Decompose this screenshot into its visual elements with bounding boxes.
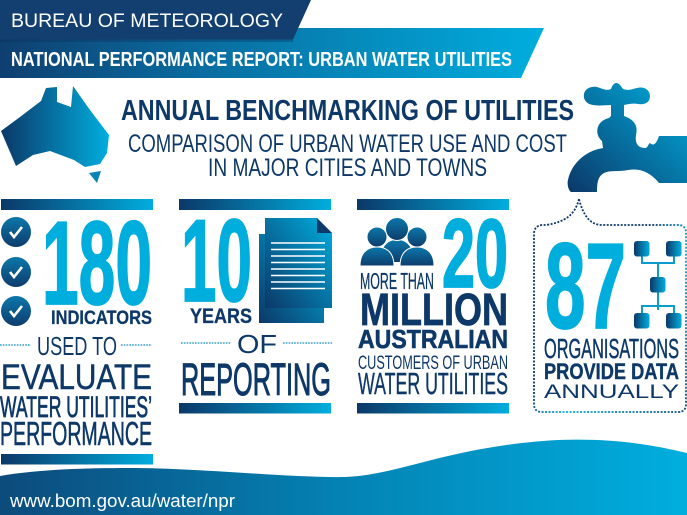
title: ANNUAL BENCHMARKING OF UTILITIES	[121, 95, 574, 127]
label: customers of urban: CUSTOMERS OF URBAN	[358, 353, 508, 374]
icon: check marks	[1, 217, 31, 326]
panel: more than 20 million customers	[357, 199, 509, 414]
icon: map of Australia	[1, 86, 109, 183]
label: australian: AUSTRALIAN	[358, 324, 508, 354]
icon: network diagram	[634, 241, 682, 328]
number 10: 10	[181, 195, 252, 326]
footer url: www.bom.gov.au/water/npr	[9, 490, 235, 511]
label: indicators: INDICATORS	[51, 307, 152, 329]
label: reporting: REPORTING	[181, 354, 331, 405]
label: million: MILLION	[360, 284, 508, 335]
panel: 10 years of reporting	[179, 195, 332, 414]
label: years: YEARS	[190, 304, 252, 328]
panel: 180 indicators	[0, 197, 153, 464]
icon: water tap	[568, 83, 687, 192]
number 20: 20	[442, 199, 508, 308]
icon: group of people	[360, 218, 434, 266]
label: of: OF	[237, 329, 277, 359]
subtitle	[128, 130, 567, 182]
label: used to: USED TO	[37, 331, 117, 361]
label: annually: ANNUALLY	[544, 382, 679, 403]
header banner: bureau of meteorology	[0, 0, 311, 40]
label: performance: PERFORMANCE	[0, 416, 152, 453]
number 180: 180	[42, 197, 152, 330]
dotted callout outline	[534, 199, 686, 412]
panel: 87 organisations callout	[534, 199, 686, 412]
header banner: bureau of meteorology: BUREAU OF METEOROLOGY	[11, 11, 283, 32]
header banner: national performance report: NATIONAL PERFORMANCE REPORT: URBAN WATER UTILITIES	[11, 49, 512, 71]
footer wave	[0, 440, 687, 515]
label: water utilities: WATER UTILITIES	[358, 367, 508, 401]
subtitle: IN MAJOR CITIES AND TOWNS	[208, 154, 487, 182]
icon: document	[259, 218, 332, 323]
label: more than: MORE THAN	[360, 268, 434, 294]
number 87: 87	[545, 218, 626, 354]
header banner: national performance report	[0, 28, 544, 78]
label: water utilities': WATER UTILITIES’	[0, 391, 152, 424]
label: evaluate: EVALUATE	[1, 358, 152, 397]
